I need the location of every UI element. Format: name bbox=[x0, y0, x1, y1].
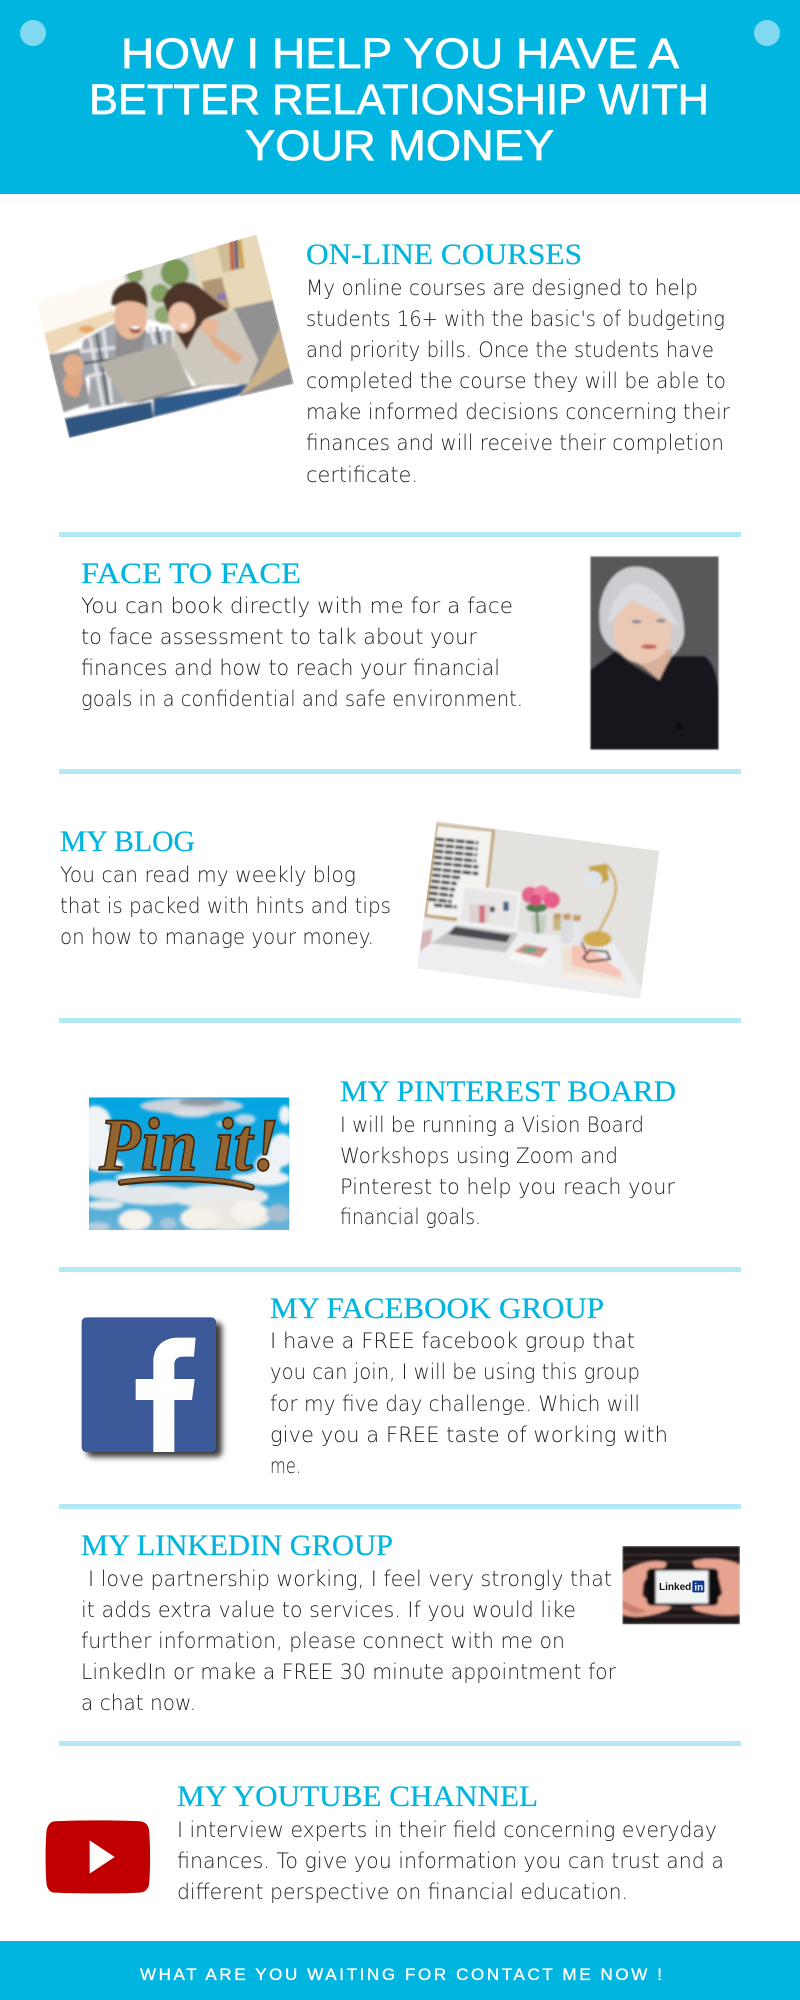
text block: LinkedIn or make a FREE 30 minute appointment for bbox=[81, 1660, 616, 1684]
text block: on how to manage your money. bbox=[60, 925, 374, 949]
text block: and priority bills. Once the students have bbox=[306, 338, 714, 362]
picture: hands holding a phone with the LinkedIn logo bbox=[622, 1546, 740, 1624]
picture: hands holding a phone with the LinkedIn logo: Linked bbox=[659, 1582, 691, 1593]
text block bbox=[60, 863, 391, 949]
call to action: WHAT ARE YOU WAITING FOR CONTACT ME NOW ! bbox=[140, 1965, 662, 1984]
text block: for my five day challenge. Which will bbox=[270, 1392, 640, 1416]
panel: my blog bbox=[60, 815, 667, 1005]
text block: Pinterest to help you reach your bbox=[340, 1175, 675, 1199]
text block: to face assessment to talk about your bbox=[81, 625, 477, 649]
heading: ON-LINE COURSES bbox=[306, 238, 582, 271]
picture: hands holding a phone with the LinkedIn logo: in bbox=[694, 1583, 703, 1594]
text block: finances. To give you information you can trust and a bbox=[177, 1849, 724, 1873]
text block bbox=[270, 1329, 668, 1478]
panel: my youtube channel bbox=[46, 1780, 724, 1904]
text block: You can read my weekly blog bbox=[60, 863, 356, 887]
title bbox=[89, 30, 709, 170]
text block: I interview experts in their field concerning everyday bbox=[177, 1818, 717, 1842]
panel: face to face bbox=[81, 556, 719, 750]
text block: finances and will receive their completion bbox=[306, 431, 724, 455]
title: HOW I HELP YOU HAVE A bbox=[121, 30, 679, 78]
title: BETTER RELATIONSHIP WITH bbox=[89, 76, 709, 124]
text block bbox=[81, 1567, 616, 1715]
panel: my linkedin group bbox=[81, 1529, 740, 1715]
heading: MY LINKEDIN GROUP bbox=[81, 1529, 393, 1562]
text block: My online courses are designed to help bbox=[306, 276, 698, 300]
photo: couple celebrating at a laptop bbox=[30, 230, 300, 443]
text block: different perspective on financial education. bbox=[177, 1880, 628, 1904]
text block: certificate. bbox=[306, 463, 418, 487]
text block bbox=[340, 1113, 675, 1229]
panel: online courses bbox=[30, 230, 730, 487]
text block: goals in a confidential and safe environment. bbox=[81, 687, 523, 711]
heading: MY FACEBOOK GROUP bbox=[270, 1292, 604, 1325]
text block: completed the course they will be able to bbox=[306, 369, 726, 393]
icon: youtube logo bbox=[46, 1820, 150, 1893]
picture: Pin it! on a cloudy sky bbox=[78, 1097, 295, 1231]
heading: MY BLOG bbox=[60, 825, 195, 858]
text block: further information, please connect with me on bbox=[81, 1629, 565, 1653]
footer banner bbox=[0, 1941, 800, 2000]
text block: I will be running a Vision Board bbox=[340, 1113, 644, 1137]
text block: give you a FREE taste of working with bbox=[270, 1423, 668, 1447]
text block: students 16+ with the basic's of budgeting bbox=[306, 307, 725, 331]
text block: You can book directly with me for a face bbox=[81, 594, 513, 618]
photo: portrait of a woman with grey hair bbox=[590, 556, 719, 750]
text block: Workshops using Zoom and bbox=[340, 1144, 618, 1168]
icon: facebook logo bbox=[82, 1317, 222, 1457]
decorative dot right bbox=[754, 20, 780, 46]
panel: my pinterest board bbox=[78, 1075, 676, 1231]
text block bbox=[81, 594, 523, 711]
decorative dot left bbox=[20, 20, 46, 46]
text block: I have a FREE facebook group that bbox=[270, 1329, 635, 1353]
text block: you can join, I will be using this group bbox=[270, 1360, 640, 1384]
text block bbox=[306, 276, 730, 487]
pin it lettering: Pin it! bbox=[98, 1104, 279, 1187]
heading: MY YOUTUBE CHANNEL bbox=[177, 1780, 538, 1813]
panel: my facebook group bbox=[82, 1292, 668, 1478]
text block: me. bbox=[270, 1454, 301, 1478]
text block: I love partnership working, I feel very strongly that bbox=[88, 1567, 612, 1591]
text block: it adds extra value to services. If you would like bbox=[81, 1598, 576, 1622]
heading: FACE TO FACE bbox=[81, 557, 301, 590]
text block: make informed decisions concerning their bbox=[306, 400, 730, 424]
text block: a chat now. bbox=[81, 1691, 196, 1715]
text block: that is packed with hints and tips bbox=[60, 894, 391, 918]
heading: MY PINTEREST BOARD bbox=[340, 1075, 676, 1108]
header banner bbox=[0, 0, 800, 194]
text block: financial goals. bbox=[340, 1205, 481, 1229]
photo: desk with laptop, flowers and lamp bbox=[418, 821, 660, 999]
title: YOUR MONEY bbox=[245, 122, 554, 170]
text block: finances and how to reach your financial bbox=[81, 656, 500, 680]
text block bbox=[177, 1818, 724, 1904]
